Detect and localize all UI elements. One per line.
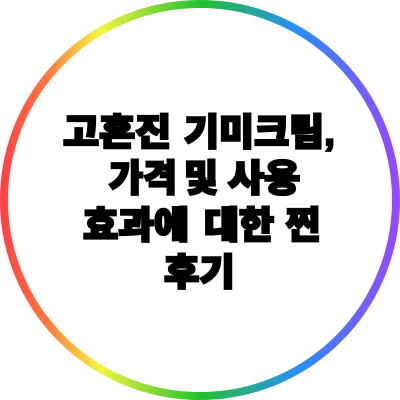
title: 후기 [164,252,235,293]
title: 찐 [286,205,320,246]
title: 효과에 [83,205,189,246]
title: 고혼진 [63,112,171,153]
title: 사용 [228,158,300,199]
title: 대한 [204,205,274,246]
title: 및 [184,158,218,199]
title: 가격 [109,158,177,199]
title: 기미크림, [184,112,335,153]
